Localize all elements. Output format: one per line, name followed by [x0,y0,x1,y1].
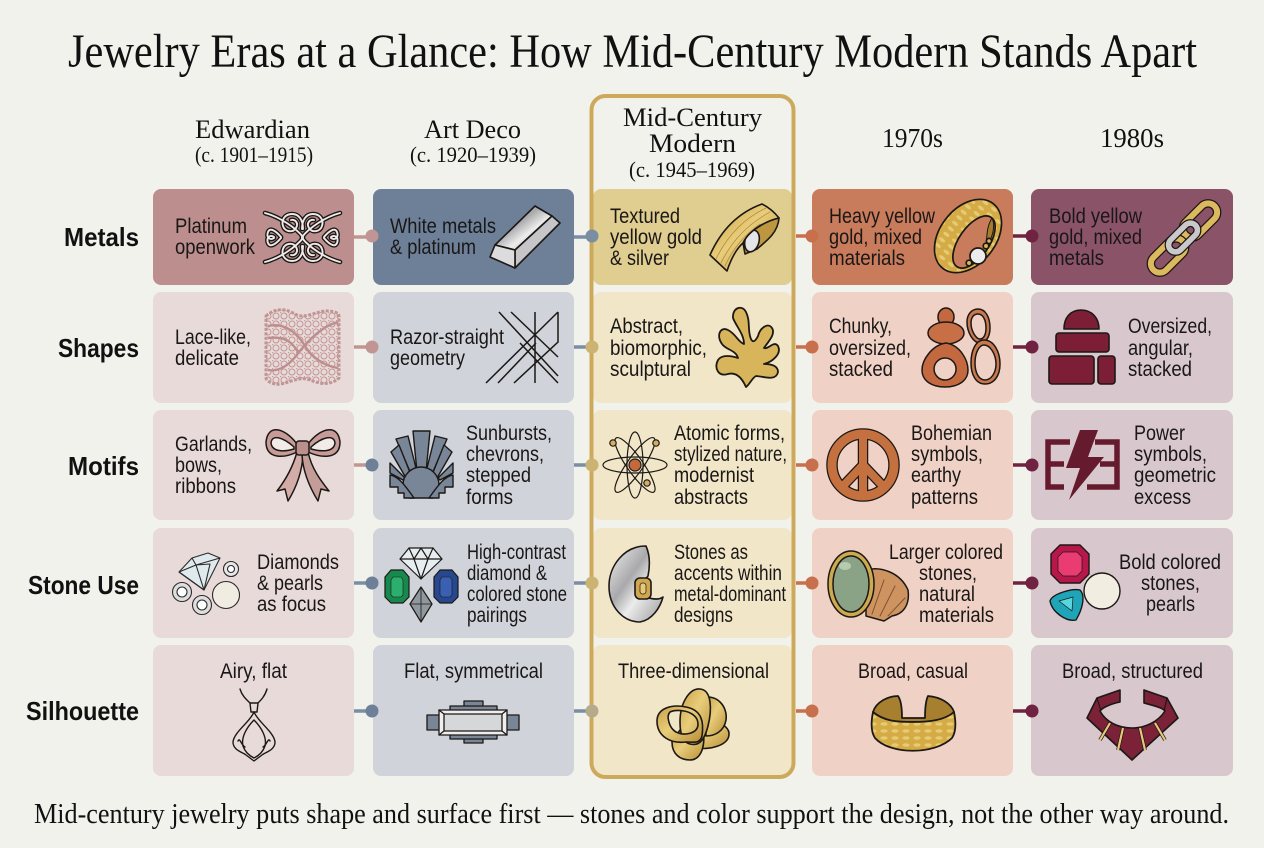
text: Larger colored stones, natural materials: Larger colored [889,541,1003,564]
row label: Metals: Metals [64,222,139,252]
icon: deco bar brooch [427,701,519,743]
icon: ruby, pearl and teal trillion [1050,545,1120,620]
text: High-contrast diamond and colored stone pairings: pairings [467,604,527,627]
text: Garlands, bows, ribbons [175,433,252,498]
text: Platinum openwork: openwork [175,236,255,259]
text: Stones as accents within metal-dominant designs: designs [674,604,733,627]
text: Atomic forms, stylized nature, modernist abstracts: modernist [674,464,754,487]
text: Garlands, bows, ribbons: ribbons [175,475,236,498]
text: High-contrast diamond and colored stone pairings: diamond & [467,562,547,585]
icon: openwork scrolls [265,213,340,262]
text: Larger colored stones, natural materials: natural [919,583,975,606]
text: Bold yellow gold, mixed metals: gold, mixed [1049,226,1142,249]
panel: 1980s stone use [1031,528,1233,638]
text: Abstract, biomorphic, sculptural: Abstract, [610,315,683,338]
column heading: Art Deco: Art Deco [424,115,521,144]
text: Larger colored stones, natural materials [889,541,1003,627]
text: Power symbols, geometric excess: Power [1134,422,1185,445]
icon: diamond, emerald, sapphire [385,548,458,622]
column heading: Edwardian [195,115,313,167]
column heading: 1980s: 1980s [1100,123,1164,153]
text: Chunky, oversized, stacked: Chunky, [829,315,892,338]
icon: broad gold cuff [872,696,955,751]
text: Lace-like, delicate [175,326,251,370]
text: Airy, flat: Airy, flat [220,660,287,683]
text: Sunbursts, chevrons, stepped forms: stepped [466,464,531,487]
text: Chunky, oversized, stacked: oversized, [829,337,911,360]
icon: platinum bar [490,206,560,268]
panel: 1980s metals [1031,189,1233,285]
text: Heavy yellow gold, mixed materials: materials [829,247,905,270]
text: Bold yellow gold, mixed metals: metals [1049,247,1104,270]
text: Flat, symmetrical: Flat, symmetrical [404,660,543,683]
text: Diamonds and pearls as focus: & pearls [257,572,323,595]
text: Abstract, biomorphic, sculptural: biomorphic, [610,337,707,360]
text: Razor-straight geometry [390,326,504,370]
text: Broad, structured: Broad, structured [1062,660,1203,683]
text: Oversized, angular, stacked: stacked [1128,358,1192,381]
text: Bohemian symbols, earthy patterns: patterns [911,486,978,509]
row label: Motifs: Motifs [68,451,139,481]
icon: biomorphic leaf [716,308,779,387]
row label: Stone Use: Stone Use [28,570,139,600]
column heading: Art Deco: (c. 1920–1939) [410,142,536,167]
column heading: Edwardian: Edwardian [195,115,310,144]
text: Lace-like, delicate: Lace-like, [175,326,251,349]
text: Larger colored stones, natural materials: stones, [919,562,977,585]
text: Platinum openwork: Platinum [175,215,247,238]
text: Atomic forms, stylized nature, modernist abstracts [674,422,787,509]
icon: stacked terracotta earrings [922,308,1000,387]
column heading: Art Deco [410,115,536,167]
text: Bold colored stones, pearls: pearls [1146,593,1195,616]
connectors: Stone Use row [354,576,1038,590]
column heading: Mid-Century Modern [623,103,762,182]
text: Oversized, angular, stacked: Oversized, [1128,315,1212,338]
row label: Silhouette: Silhouette [26,696,139,726]
text: Textured yellow gold and silver [610,205,702,270]
panel: Mid-Century shapes [593,292,792,403]
panel: 1970s stone use [812,528,1013,638]
icon: maroon collar necklace [1087,690,1178,760]
panel: Mid-Century stone use [593,528,792,638]
text: Larger colored stones, natural materials: materials [919,604,994,627]
panel: 1980s motifs [1031,410,1233,520]
text: Garlands, bows, ribbons: bows, [175,454,222,477]
panel: 1970s motifs [812,410,1013,520]
text: White metals and platinum: White metals [390,215,496,238]
text: High-contrast diamond and colored stone pairings [467,541,567,627]
text: Textured yellow gold and silver: & silver [610,247,669,270]
text: Power symbols, geometric excess: geometric [1134,464,1216,487]
highlight frame: Mid-Century Modern column [592,96,794,777]
panel: Art Deco motifs [373,410,574,520]
text: Diamonds and pearls as focus [257,551,339,616]
text: Sunbursts, chevrons, stepped forms: Sunbursts, [466,422,552,445]
text: Textured yellow gold and silver: yellow gold [610,226,702,249]
text: Bold colored stones, pearls: Bold colored [1119,551,1221,574]
panel: Edwardian motifs [153,410,354,520]
row label: Shapes: Shapes [58,333,139,363]
panel: Art Deco metals [373,189,574,285]
text: Garlands, bows, ribbons: Garlands, [175,433,252,456]
column heading: Mid-Century Modern: Modern [649,129,736,158]
text: Bold yellow gold, mixed metals: Bold yellow [1049,205,1143,228]
text: White metals and platinum: & platinum [390,236,476,259]
text: Razor-straight geometry: geometry [390,347,465,370]
text: Platinum openwork [175,215,255,259]
icon: lightning bolt and brackets [1048,430,1117,500]
connectors: Metals row [354,230,1038,242]
panel: 1980s silhouette [1031,645,1233,776]
connectors: Shapes row [354,340,1038,354]
column heading: Mid-Century Modern: (c. 1945–1969) [629,157,755,182]
text: Stones as accents within metal-dominant designs: accents within [674,562,782,585]
panel: 1980s shapes [1031,292,1233,403]
text: Bold yellow gold, mixed metals [1049,205,1143,270]
panel: Edwardian metals [153,189,354,285]
text: Diamonds and pearls as focus: Diamonds [257,551,339,574]
text: Power symbols, geometric excess: excess [1134,486,1191,509]
panel: Mid-Century silhouette [593,645,792,776]
text: Bold colored stones, pearls [1119,551,1221,616]
text: Chunky, oversized, stacked: stacked [829,358,893,381]
panel: Edwardian shapes [153,292,354,403]
text: Power symbols, geometric excess: symbols, [1134,443,1207,466]
text: Broad, casual: Broad, casual [858,660,968,683]
text: Heavy yellow gold, mixed materials: Heavy yellow [829,205,936,228]
panel: Art Deco shapes [373,292,574,403]
icon: hammered gold ring with pearl [921,186,1015,286]
icon: peace sign [832,434,894,496]
text: Stones as accents within metal-dominant designs: metal-dominant [674,583,786,606]
connectors: Silhouette row [354,704,1038,718]
text: White metals and platinum [390,215,496,259]
text: Stones as accents within metal-dominant designs [674,541,786,627]
text: Sunbursts, chevrons, stepped forms: chevrons, [466,443,544,466]
icon: sculptural gold knot [657,689,729,760]
icon: atom [603,432,667,498]
icon: silver crescent with stone [609,546,663,622]
text: Textured yellow gold and silver: Textured [610,205,680,228]
text: Razor-straight geometry: Razor-straight [390,326,504,349]
text: Atomic forms, stylized nature, modernist abstracts: stylized nature, [674,443,787,466]
text: Atomic forms, stylized nature, modernist abstracts: abstracts [674,486,748,509]
icon: razor lines [486,312,558,383]
icon: lace swatch [266,310,339,384]
icon: ribbon bow [266,430,340,501]
icon: deco sunburst fan [390,431,453,498]
text: Atomic forms, stylized nature, modernist abstracts: Atomic forms, [674,422,785,445]
text: Bold colored stones, pearls: stones, [1141,572,1200,595]
text: Heavy yellow gold, mixed materials: gold, mixed [829,226,922,249]
panel: 1970s shapes [812,292,1013,403]
text: Diamonds and pearls as focus: as focus [257,593,326,616]
connectors: Motifs row [354,458,1038,472]
panel: Art Deco silhouette [373,645,574,776]
text: Power symbols, geometric excess [1134,422,1216,509]
icon: diamonds and pearl [172,553,240,614]
text: Sunbursts, chevrons, stepped forms [466,422,552,509]
column heading: Edwardian: (c. 1901–1915) [195,142,313,167]
column heading: Mid-Century Modern: Mid-Century [623,103,762,132]
panel: Edwardian stone use [153,528,354,638]
panel: Mid-Century metals [593,189,792,285]
panel: Art Deco stone use [373,528,574,638]
text: Sunbursts, chevrons, stepped forms: forms [466,486,513,509]
panel: Mid-Century motifs [593,410,792,520]
text: Bohemian symbols, earthy patterns [911,422,992,509]
text: Heavy yellow gold, mixed materials [829,205,936,270]
text: Bohemian symbols, earthy patterns: symbols, [911,443,983,466]
panel: Edwardian silhouette [153,645,354,776]
text: Lace-like, delicate: delicate [175,347,239,370]
text: Abstract, biomorphic, sculptural: sculptural [610,358,691,381]
text: Stones as accents within metal-dominant designs: Stones as [674,541,748,564]
text: Abstract, biomorphic, sculptural [610,315,707,381]
text: High-contrast diamond and colored stone pairings: colored stone [467,583,567,606]
text: Bohemian symbols, earthy patterns: earthy [911,464,961,487]
text: Three-dimensional: Three-dimensional [618,660,769,683]
text: High-contrast diamond and colored stone pairings: High-contrast [467,541,566,564]
text: Bohemian symbols, earthy patterns: Bohemian [911,422,992,445]
text: Chunky, oversized, stacked [829,315,911,381]
icon: chain links [1147,200,1221,276]
text: Oversized, angular, stacked [1128,315,1212,381]
panel: 1970s metals [812,186,1015,286]
column heading: 1970s: 1970s [882,123,943,153]
text: Oversized, angular, stacked: angular, [1128,337,1193,360]
icon: textured gold ring [710,204,779,271]
icon: stacked angular blocks [1049,310,1115,384]
icon: green cabochon and shell [828,551,908,621]
icon: airy pendant [233,689,275,761]
panel: 1970s silhouette [812,645,1013,776]
